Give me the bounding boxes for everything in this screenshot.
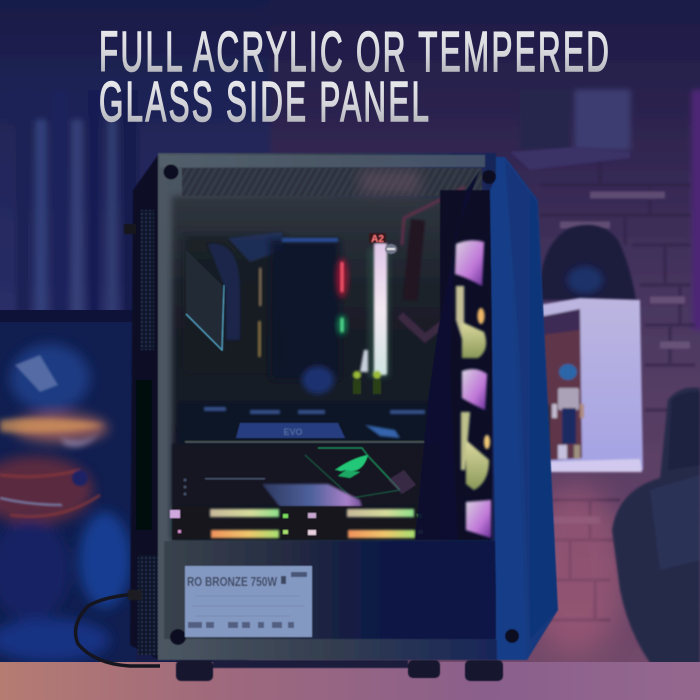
glass lower border	[160, 640, 497, 660]
debug display A2	[369, 233, 386, 245]
dark tinted glass edge	[415, 170, 480, 540]
graphics card	[178, 402, 490, 444]
M.2 heatsink	[262, 484, 362, 507]
top glass rim	[160, 155, 485, 167]
front panel mesh strip	[505, 160, 557, 640]
collectible figure	[540, 364, 584, 460]
case interior	[172, 196, 490, 540]
motherboard lower with ROG logo	[172, 444, 490, 506]
inner blue pillar	[490, 158, 527, 660]
case feet	[176, 660, 503, 681]
dark lower motherboard band	[172, 506, 490, 540]
rear vents and I/O	[124, 210, 158, 655]
gaming chair	[612, 388, 700, 676]
case screws	[164, 164, 519, 645]
white wall shelf with figure	[533, 298, 643, 472]
PSU label	[185, 566, 312, 637]
PC case	[124, 153, 558, 660]
power cable	[76, 594, 160, 666]
wall shelf top	[510, 147, 630, 170]
case rear side	[130, 155, 160, 660]
PSU shroud	[164, 541, 496, 639]
wooden desk	[0, 662, 700, 700]
cables	[400, 187, 465, 338]
fans	[455, 240, 491, 538]
dark area behind fans	[440, 190, 492, 540]
motherboard and CPU block	[185, 232, 340, 394]
RAM module lit white	[353, 233, 397, 394]
glass panel	[158, 153, 496, 660]
graphics card: EVO	[283, 427, 303, 437]
brick wall	[540, 155, 695, 620]
title	[99, 19, 609, 133]
title line 2: GLASS SIDE PANEL	[99, 69, 429, 133]
RGB strips	[170, 509, 423, 538]
painting on the left	[0, 310, 136, 662]
pink glow on lower wall	[525, 485, 625, 655]
dark object on upper shelf	[540, 225, 636, 300]
PSU label: RO BRONZE 750W	[187, 574, 278, 589]
top mesh stripes	[182, 168, 482, 196]
title line 1: FULL ACRYLIC OR TEMPERED	[99, 19, 609, 83]
LED strips on heatsink	[336, 258, 348, 335]
debug display A2: A2	[371, 234, 384, 245]
front panel	[486, 157, 558, 660]
